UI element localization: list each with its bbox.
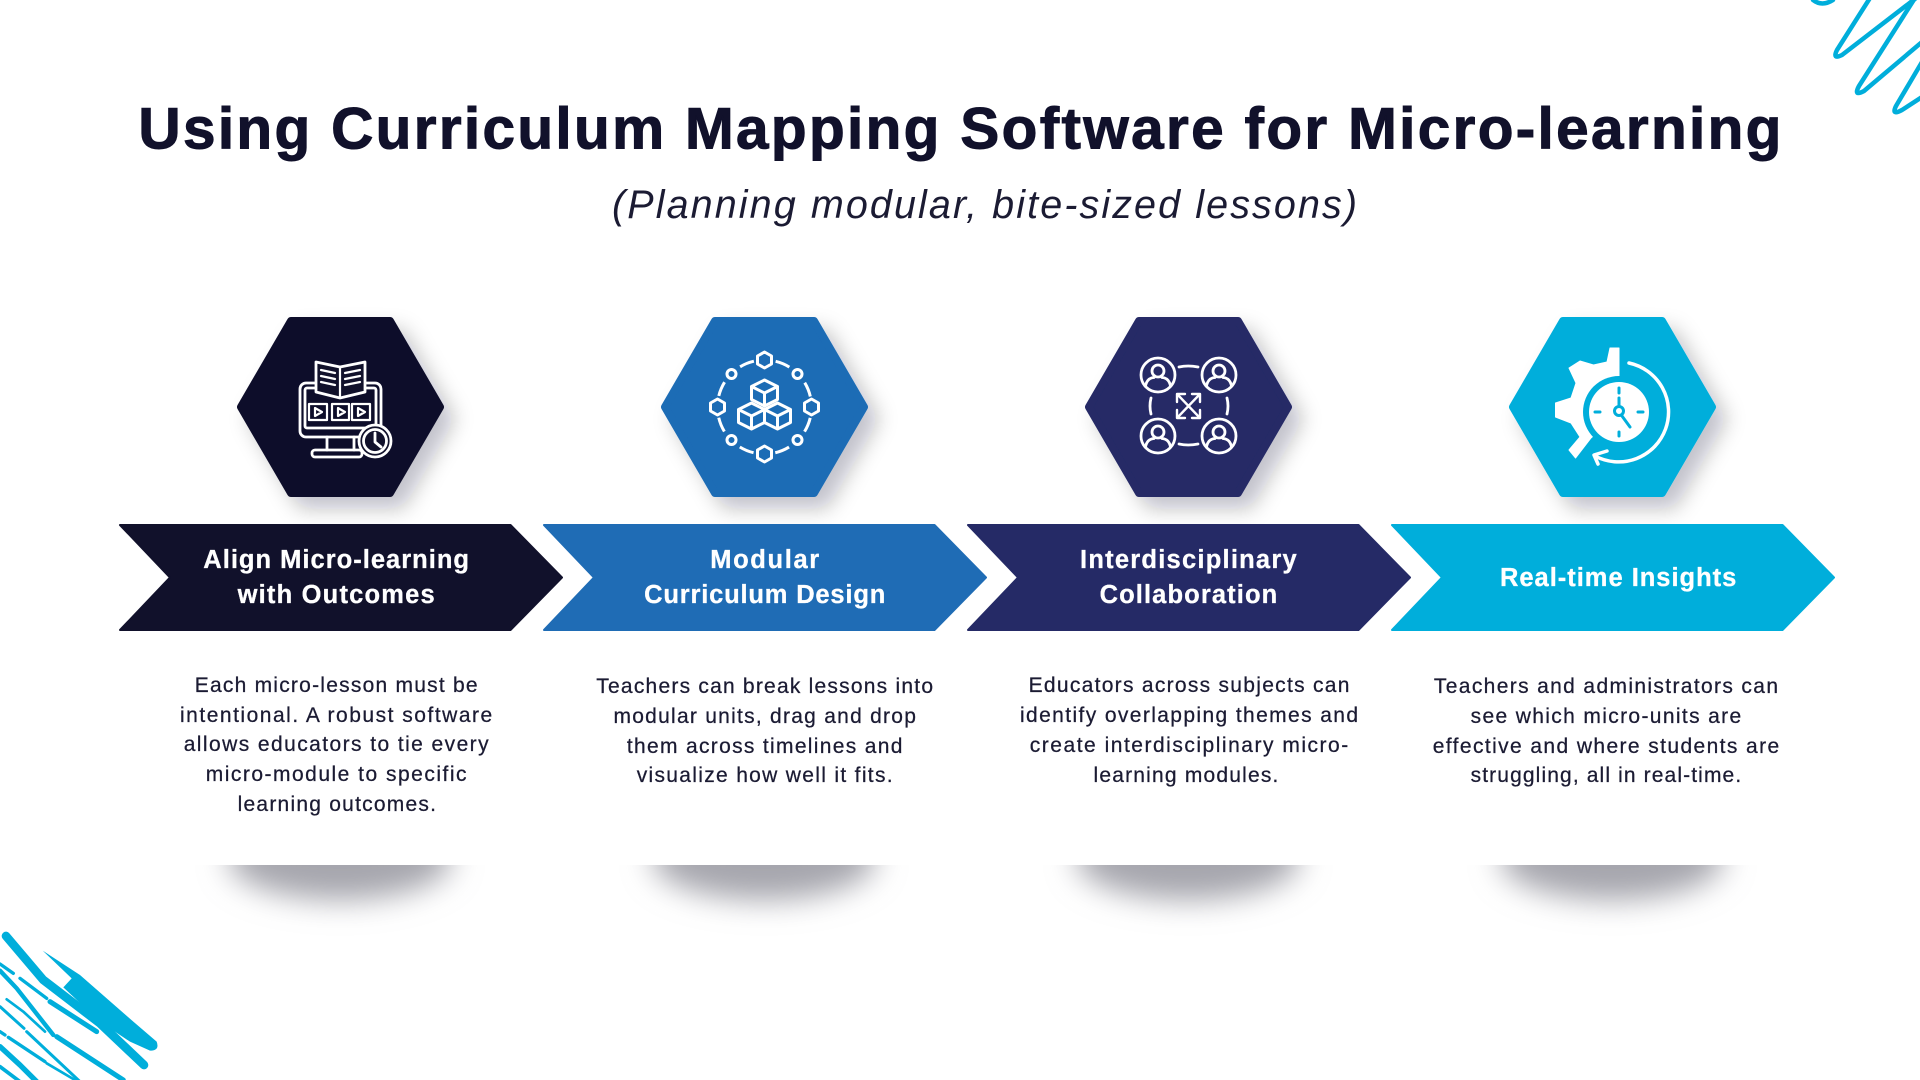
pedestal shadow 1 (214, 865, 466, 918)
step 3: interdisciplinary collaboration (968, 321, 1410, 900)
description 4: effective and where students are (1433, 735, 1779, 758)
step 1: align micro-learning with outcomes (120, 321, 562, 900)
description 1: learning outcomes. (238, 793, 436, 816)
arrow banner 1 (120, 525, 562, 630)
pedestal shadow 3 (1062, 865, 1314, 918)
pedestal shadow 2 (638, 865, 890, 918)
description 1: allows educators to tie every (184, 733, 489, 756)
step 4: real-time insights (1392, 321, 1834, 900)
description 4: Teachers and administrators can (1434, 675, 1778, 698)
description 3 (1020, 674, 1358, 787)
banner 2 heading (644, 546, 885, 609)
icon: monitor with book and clock (300, 362, 391, 457)
step 2: modular curriculum design (544, 321, 986, 900)
title: Using Curriculum Mapping Software for Micro-learning (138, 96, 1781, 162)
hexagon 3 (1089, 321, 1288, 493)
description 1: intentional. A robust software (180, 704, 492, 727)
description 2: them across timelines and (627, 735, 902, 758)
arrow banner 4 (1392, 525, 1834, 630)
subtitle: (Planning modular, bite-sized lessons) (612, 183, 1357, 227)
description 3: create interdisciplinary micro- (1030, 734, 1348, 757)
banner 1 heading: with Outcomes (237, 581, 435, 609)
description 2 (596, 675, 933, 787)
arrow banner 2 (544, 525, 986, 630)
pedestal shadow 4 (1486, 865, 1738, 918)
decorative scribble: bottom left (0, 936, 157, 1080)
description 4: struggling, all in real-time. (1471, 764, 1741, 787)
description 1 (180, 674, 492, 816)
icon: gear with clock (1556, 348, 1669, 464)
description 1: micro-module to specific (206, 763, 466, 786)
description 2: Teachers can break lessons into (596, 675, 933, 698)
banner 4 heading: Real-time Insights (1500, 564, 1736, 592)
hexagon 4 (1513, 321, 1712, 493)
description 3: identify overlapping themes and (1020, 704, 1358, 727)
description 4: see which micro-units are (1471, 705, 1741, 728)
banner 2 heading: Modular (710, 546, 819, 574)
hexagon 1 (241, 321, 440, 493)
description 1: Each micro-lesson must be (195, 674, 478, 697)
arrow banner 3 (968, 525, 1410, 630)
description 3: learning modules. (1094, 764, 1278, 787)
description 2: visualize how well it fits. (637, 764, 893, 787)
banner 2 heading: Curriculum Design (644, 581, 885, 609)
banner 1 heading (203, 546, 469, 609)
icon: four people connected (1141, 358, 1236, 453)
icon: modular cubes in a ring (710, 352, 818, 462)
description 4 (1433, 675, 1779, 787)
banner 3 heading: Collaboration (1100, 581, 1277, 609)
banner 1 heading: Align Micro-learning (203, 546, 469, 574)
banner 3 heading (1080, 546, 1298, 609)
decorative scribble: top right (1813, 0, 1920, 112)
banner 3 heading: Interdisciplinary (1080, 546, 1298, 574)
hexagon 2 (665, 321, 864, 493)
description 3: Educators across subjects can (1029, 674, 1349, 697)
description 2: modular units, drag and drop (614, 705, 916, 728)
